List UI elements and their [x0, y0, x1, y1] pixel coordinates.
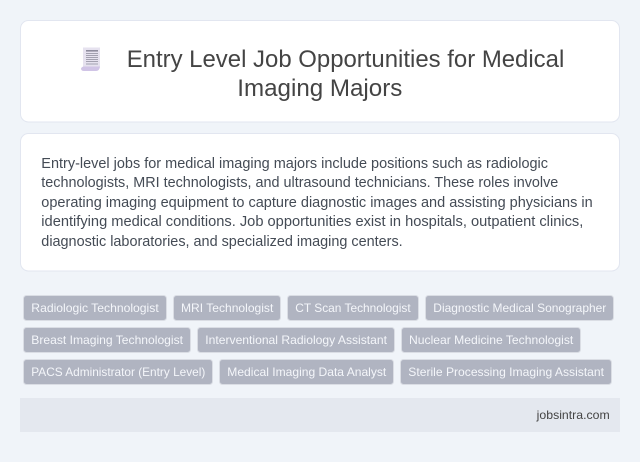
tag: Breast Imaging Technologist [31, 333, 184, 347]
footer [20, 398, 620, 432]
tag: CT Scan Technologist [295, 301, 411, 315]
tag [288, 296, 418, 320]
title: Entry Level Job Opportunities for Medical [127, 46, 564, 73]
tag [402, 328, 580, 352]
footer: jobsintra.com [536, 408, 610, 422]
tag: Radiologic Technologist [31, 301, 159, 315]
text block: description [41, 156, 593, 250]
tag [400, 360, 612, 384]
tag [174, 296, 280, 320]
text block: description: technologists, MRI technologists, and ultrasound technicians. These roles involve [41, 175, 558, 191]
text block: description: identifying medical conditions. Job opportunities exist in hospitals, outpatient clinics, [41, 214, 583, 230]
tag: Medical Imaging Data Analyst [227, 365, 387, 379]
text block: description: Entry-level jobs for medical imaging majors include positions such as radiologic [41, 156, 548, 172]
tag [198, 328, 394, 352]
panel: description [20, 134, 620, 271]
panel: header [20, 20, 620, 122]
tag: Sterile Processing Imaging Assistant [408, 365, 605, 379]
tag [426, 296, 614, 320]
tag: PACS Administrator (Entry Level) [31, 365, 205, 379]
tag: MRI Technologist [181, 301, 274, 315]
tag [24, 296, 166, 320]
tag: Interventional Radiology Assistant [205, 333, 388, 347]
tag [24, 328, 190, 352]
tags: job titles [24, 296, 614, 384]
icon: document scroll [81, 48, 100, 71]
title [127, 46, 564, 102]
tag: Diagnostic Medical Sonographer [433, 301, 606, 315]
title: Imaging Majors [237, 75, 402, 102]
text block: description: operating imaging equipment to capture diagnostic images and assisting physicians in [41, 195, 593, 211]
tag [220, 360, 394, 384]
tag [24, 360, 212, 384]
text block: description: diagnostic laboratories, and specialized imaging centers. [41, 234, 403, 250]
tag: Nuclear Medicine Technologist [409, 333, 574, 347]
